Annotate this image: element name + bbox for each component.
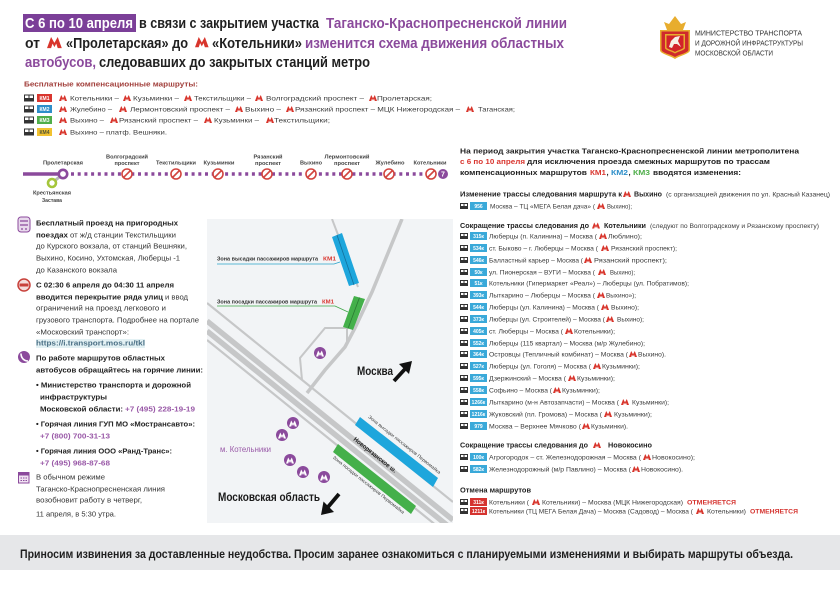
route 311k: Котельники ( xyxy=(489,500,530,506)
icon: Moscow region coat of arms xyxy=(660,16,690,59)
route 558k xyxy=(460,386,600,394)
route 50k: 50к xyxy=(474,270,483,276)
section: shortened to Novokosino: Новокосино xyxy=(608,442,652,450)
station labels: Текстильщики xyxy=(156,160,196,166)
route 546k xyxy=(460,256,667,264)
route KM3: Текстильщики; xyxy=(274,118,330,124)
map callout: drop-off zone: Зона высадки пассажиров маршрута xyxy=(217,256,319,262)
route 373k: Люберцы (ул. Строителей) – Москва ( xyxy=(489,316,606,324)
route KM2: Жулебино – xyxy=(70,106,112,114)
text: intro: , xyxy=(628,168,631,177)
map: metro exits xyxy=(276,347,330,483)
route 546k: Рязанский проспект); xyxy=(594,256,667,264)
text: normal operation resumes: возобновит работу в четверг, xyxy=(36,496,142,504)
route 100k: Агрогородок – ст. Железнодорожная – Москва ( xyxy=(489,454,642,462)
route 311k xyxy=(460,498,736,506)
route 527k xyxy=(460,362,640,370)
route 373k: Выхино); xyxy=(617,316,644,324)
map: pick-up zone Pervomayka xyxy=(333,444,416,514)
route 311k: ОТМЕНЯЕТСЯ xyxy=(687,500,736,506)
route 364k: 364к xyxy=(473,352,484,358)
station labels: Крестьянская xyxy=(33,190,71,196)
icon: calendar xyxy=(18,472,29,483)
text: intro: компенсационных маршрутов xyxy=(460,168,587,177)
text: normal operation resumes xyxy=(36,472,165,518)
text: intro: КМ1 xyxy=(590,168,607,177)
route 405k: 405к xyxy=(473,329,484,335)
icon: no entry xyxy=(18,279,30,291)
route 582k xyxy=(460,465,683,474)
route KM2: Лермонтовский проспект – xyxy=(130,106,230,114)
text: free suburban trains: от ж/д станции Текстильщики xyxy=(70,230,176,240)
section: route change to Vykhino: Выхино xyxy=(634,192,662,198)
text: free suburban trains xyxy=(36,218,187,274)
route 558k: Софьино – Москва ( xyxy=(489,388,553,394)
heading: free routes: Бесплатные компенсационные маршруты: xyxy=(24,82,198,88)
label: Novoryazanskoe highway: Новорязанское ш. xyxy=(352,436,398,475)
text: hotlines: автобусов обращайтесь на горячие линии: xyxy=(36,366,203,374)
map label: Kotelniki metro: м. Котельники xyxy=(220,445,271,454)
route KM4: Выхино – платф. Вешняки. xyxy=(70,130,167,136)
route 50k: Выхино); xyxy=(610,270,635,276)
station labels xyxy=(33,154,446,204)
text: road closures: грузового транспорта. Подробнее на портале xyxy=(36,316,199,324)
route 315k: Люберцы (п. Калинина) – Москва ( xyxy=(489,232,598,240)
route KM3 xyxy=(24,116,330,124)
section: route change to Vykhino xyxy=(460,190,830,210)
route KM3: Рязанский проспект – xyxy=(119,116,198,124)
route 595k xyxy=(460,374,615,382)
station labels: проспект xyxy=(255,161,281,167)
route 51k: 51к xyxy=(474,281,483,287)
section: cancelled routes: Отмена маршрутов xyxy=(460,488,532,494)
route KM1: Кузьминки – xyxy=(133,96,179,102)
section: shortened to Kotelniki: Котельники xyxy=(604,223,646,230)
text: normal operation resumes: В обычном режиме xyxy=(36,472,105,482)
title: Таганско-Краснопресненской линии xyxy=(326,15,567,32)
route 1211k: Котельники) xyxy=(707,508,746,516)
text: hotlines xyxy=(36,354,203,468)
text: hotlines: +7 (495) 968-87-68 xyxy=(40,458,110,468)
map callout: pick-up zone: КМ1 xyxy=(322,300,335,306)
map callout: drop-off zone: КМ1 xyxy=(323,256,337,262)
route 1211k: Котельники (ТЦ МЕГА Белая Дача) – Москва (Садовод) – Москва ( xyxy=(489,508,694,516)
text: intro: вводятся изменения: xyxy=(653,168,741,177)
route 956: Москва – ТЦ «МЕГА Белая дача» ( xyxy=(490,204,596,210)
text: ministry name: МИНИСТЕРСТВО ТРАНСПОРТА xyxy=(695,30,802,38)
route KM1: Волгоградский проспект – xyxy=(266,94,364,102)
text: hotlines: инфраструктуры xyxy=(40,392,107,402)
map: pick-up zone KM1 xyxy=(343,296,365,330)
route 1266k: Кузьминки); xyxy=(632,400,669,406)
text: intro: , xyxy=(606,168,609,177)
route 595k: Дзержинский – Москва ( xyxy=(489,374,567,382)
route 956: Выхино); xyxy=(607,204,632,210)
station labels: проспект xyxy=(334,161,360,167)
route 534k: Рязанский проспект); xyxy=(611,244,677,252)
route 956 xyxy=(460,202,632,210)
route 1266k: Лыткарино (м-н Автозапчасти) – Москва ( xyxy=(489,400,620,406)
icon: phone xyxy=(18,351,30,363)
station labels: Застава xyxy=(42,198,63,204)
route 558k: 558к xyxy=(473,388,484,394)
text: road closures: вводится перекрытие ряда улиц xyxy=(36,292,163,302)
panel: left information column xyxy=(18,217,203,518)
line number badge xyxy=(438,169,448,179)
map: drop-off zone Pervomayka xyxy=(355,417,438,487)
map roads xyxy=(207,219,453,539)
route 979: Москва – Верхнее Мячково ( xyxy=(489,424,582,430)
text: hotlines: • Горячая линия ГУП МО «Мострансавто»: xyxy=(36,420,195,428)
route 1216k: Жуковский (пл. Громова) – Москва ( xyxy=(489,410,603,418)
text: road closures: ограничений на проезд легкового и xyxy=(36,304,166,312)
route 1216k xyxy=(460,410,652,418)
line number badge: 7 xyxy=(441,172,445,178)
route KM2: Выхино – xyxy=(245,106,281,114)
route 544k xyxy=(460,303,639,312)
panel: free compensation routes xyxy=(24,82,515,136)
route 527k: 527к xyxy=(473,364,484,370)
text: road closures: https://i.transport.mos.ru/tkl xyxy=(36,338,145,348)
route 311k: 311к xyxy=(473,500,484,506)
line diagram: closed section xyxy=(23,154,448,204)
station labels: Волгоградский xyxy=(106,154,148,160)
text: hotlines: • Горячая линия ООО «Ранд-Транс»: xyxy=(36,446,172,456)
map callout: pick-up zone: Зона посадки пассажиров маршрута xyxy=(217,300,318,306)
route 315k xyxy=(460,232,642,240)
map: drop-off zone KM1 xyxy=(332,233,359,286)
route 552k xyxy=(460,339,645,348)
text: hotlines: +7 (495) 228-19-19 xyxy=(125,404,195,414)
text: hotlines: • Министерство транспорта и дорожной xyxy=(36,380,191,390)
station labels: Выхино xyxy=(300,160,323,166)
route 582k: 582к xyxy=(473,467,484,473)
route 979: Кузьминки). xyxy=(591,424,628,430)
route 364k: Выхино). xyxy=(638,352,666,358)
arrow: to Moscow region xyxy=(321,494,339,515)
station labels: Кузьминки xyxy=(204,160,234,166)
route 527k: Люберцы (ул. Гоголя) – Москва ( xyxy=(489,362,592,370)
route KM3: Кузьминки – xyxy=(214,118,259,124)
section: route change to Vykhino: Изменение трассы следования маршрута к xyxy=(460,192,623,198)
route 1266k: 1266к xyxy=(472,400,486,406)
title: в связи с закрытием участка xyxy=(139,15,320,32)
route 552k: Люберцы (115 квартал) – Москва (м/р Жулебино); xyxy=(489,340,645,348)
text: hotlines: По работе маршрутов областных xyxy=(36,354,166,362)
text: hotlines: Московской области: xyxy=(40,404,123,414)
route 393k: Выхино»); xyxy=(606,292,636,300)
section: shortened to Kotelniki: (следуют по Волгоградскому и Рязанскому проспекту) xyxy=(650,223,819,230)
route 393k: Лыткарино – Люберцы – Москва ( xyxy=(489,292,596,300)
text: intro xyxy=(460,146,800,177)
title: следовавших до закрытых станций метро xyxy=(99,54,370,71)
route 595k: 595к xyxy=(473,376,484,382)
route KM1: Котельники – xyxy=(70,96,119,102)
text: free suburban trains: поездах xyxy=(36,230,69,240)
text: ministry name xyxy=(695,30,803,58)
route 315k: 315к xyxy=(473,234,484,240)
title: от xyxy=(25,35,40,52)
route 393k xyxy=(460,291,636,300)
route 527k: Кузьминки); xyxy=(602,364,640,370)
route 100k: 100к xyxy=(473,455,484,461)
route 582k: Железнодорожный (м/р Павлино) – Москва ( xyxy=(489,466,632,474)
route KM3: КМ3 xyxy=(40,118,50,124)
route 558k: Кузьминки); xyxy=(562,388,600,394)
route 373k: 373к xyxy=(473,317,484,323)
route 544k: Люберцы (ул. Калинина) – Москва ( xyxy=(489,304,600,312)
text: ministry name: МОСКОВСКОЙ ОБЛАСТИ xyxy=(695,48,773,58)
icon: train xyxy=(18,217,30,232)
title: изменится схема движения областных xyxy=(305,35,565,52)
station labels: проспект xyxy=(114,161,140,167)
closed stations xyxy=(122,169,436,179)
section: route change to Vykhino: (с организацией движения по ул. Красный Казанец) xyxy=(666,190,830,198)
route KM2: Таганская; xyxy=(478,106,515,114)
title: «Котельники» xyxy=(212,35,302,52)
station labels: Пролетарская xyxy=(43,160,83,166)
text: road closures xyxy=(36,280,199,348)
route 546k: Балластный карьер – Москва ( xyxy=(489,256,584,264)
route 1266k xyxy=(460,398,669,406)
route KM1: КМ1 xyxy=(40,96,50,102)
route KM3: Выхино – xyxy=(70,118,104,124)
route 546k: 546к xyxy=(473,258,484,264)
text: ministry name: И ДОРОЖНОЙ ИНФРАСТРУКТУРЫ xyxy=(695,38,803,48)
route KM4: КМ4 xyxy=(40,130,50,136)
route 979: 979 xyxy=(474,424,483,430)
route 1211k xyxy=(460,507,798,516)
route 582k: Новокосино). xyxy=(641,466,683,474)
text: road closures: и ввод xyxy=(165,292,189,302)
route KM1: Пролетарская; xyxy=(377,96,432,102)
text: free suburban trains: Бесплатный проезд на пригородных xyxy=(36,218,179,228)
map callout: pick-up zone xyxy=(217,300,348,312)
route 100k xyxy=(460,453,695,462)
route 50k: ул. Пионерская – ВУГИ – Москва ( xyxy=(489,270,596,276)
section: shortened to Novokosino: Сокращение трассы следования до xyxy=(460,442,588,450)
text: intro: для исключения проезда смежных маршрутов по трассам xyxy=(527,157,770,166)
section: shortened to Novokosino xyxy=(460,442,695,474)
route 544k: Выхино); xyxy=(611,304,639,312)
route 956: 956 xyxy=(474,204,483,210)
route 50k xyxy=(460,268,635,276)
route 315k: Люблино); xyxy=(608,232,642,240)
footer banner: Приносим извинения за доставленные неудобства. Просим заранее ознакомиться с планируемыми изменениями и выбирать маршруты объезда. xyxy=(20,549,793,561)
map label: Moscow: Москва xyxy=(357,364,393,378)
route 1211k: ОТМЕНЯЕТСЯ xyxy=(750,508,798,516)
section: cancelled routes xyxy=(460,488,798,516)
text: road closures: С 02:30 6 апреля до 04:30 11 апреля xyxy=(36,280,174,290)
map label: Moscow region: Московская область xyxy=(218,490,320,504)
text: intro: На период закрытия участка Таганско-Краснопресненской линии метрополитена xyxy=(460,146,800,156)
title: автобусов, xyxy=(25,54,96,71)
title xyxy=(23,14,567,71)
route KM1: Текстильщики – xyxy=(194,96,251,102)
route 405k: Котельники); xyxy=(574,328,615,336)
text: normal operation resumes: Таганско-Краснопресненская линия xyxy=(36,484,165,494)
route 405k xyxy=(460,327,615,336)
route 1216k: 1216к xyxy=(472,412,486,418)
footer banner xyxy=(0,535,840,570)
route 393k: 393к xyxy=(473,293,484,299)
route 364k: Островцы (Тепличный комбинат) – Москва ( xyxy=(489,350,629,358)
station labels: Лермонтовский xyxy=(324,154,370,160)
text: normal operation resumes: 11 апреля, в 5:30 утра. xyxy=(36,510,116,518)
panel: right route changes xyxy=(460,146,830,516)
route 979 xyxy=(460,422,628,430)
route 544k: 544к xyxy=(473,305,484,311)
label: drop-off zone text: Зона высадки пассажиров Первомайка xyxy=(367,414,443,475)
route KM2: КМ2 xyxy=(40,107,50,113)
text: free suburban trains: до Курского вокзала, от станций Вешняки, xyxy=(36,242,187,250)
route KM4 xyxy=(24,128,167,136)
route 595k: Кузьминки); xyxy=(577,376,615,382)
route 364k xyxy=(460,350,666,358)
route 534k xyxy=(460,244,677,252)
route 534k: ст. Быково – г. Люберцы – Москва ( xyxy=(489,244,599,252)
text: intro: с 6 по 10 апреля xyxy=(460,157,525,166)
route 51k: Котельники (Гипермаркет «Реал») – Люберцы (ул. Побратимов); xyxy=(489,280,689,288)
station labels: Жулебино xyxy=(374,160,405,166)
panel: map xyxy=(207,219,453,539)
arrow: to Moscow xyxy=(394,361,412,381)
route 552k: 552к xyxy=(473,341,484,347)
station labels: Котельники xyxy=(414,160,446,166)
text: intro: КМ2 xyxy=(611,168,628,177)
text: intro: КМ3 xyxy=(633,168,650,177)
text: free suburban trains: до Казанского вокзала xyxy=(36,266,118,274)
route 311k: Котельники) – Москва (МЦК Нижегородская) xyxy=(542,500,683,506)
title: С 6 по 10 апреля xyxy=(25,15,133,32)
section: shortened to Kotelniki: Сокращение трассы следования до xyxy=(460,223,589,230)
route KM1 xyxy=(24,94,432,102)
route 373k xyxy=(460,315,644,324)
text: free suburban trains: Выхино, Косино, Ухтомская, Люберцы -1 xyxy=(36,254,180,262)
route 405k: ст. Люберцы – Москва ( xyxy=(489,328,564,336)
section: shortened to Kotelniki xyxy=(460,222,819,430)
route 534k: 534к xyxy=(473,246,484,252)
station labels: Рязанский xyxy=(254,154,282,160)
title: «Пролетарская» до xyxy=(66,35,188,52)
text: road closures: «Московский транспорт»: xyxy=(36,328,129,336)
map callout: drop-off zone xyxy=(217,256,340,264)
route 1216k: Кузьминки); xyxy=(614,412,652,418)
route 100k: Новокосино); xyxy=(652,454,695,462)
route 1211k: 1211к xyxy=(472,509,486,515)
route KM2: Рязанский проспект – МЦК Нижегородская – xyxy=(295,106,460,114)
text: hotlines: +7 (800) 700-31-13 xyxy=(40,432,110,440)
route KM2 xyxy=(24,105,515,114)
label: pick-up zone text: Зона посадки пассажиров Первомайка xyxy=(332,454,406,515)
